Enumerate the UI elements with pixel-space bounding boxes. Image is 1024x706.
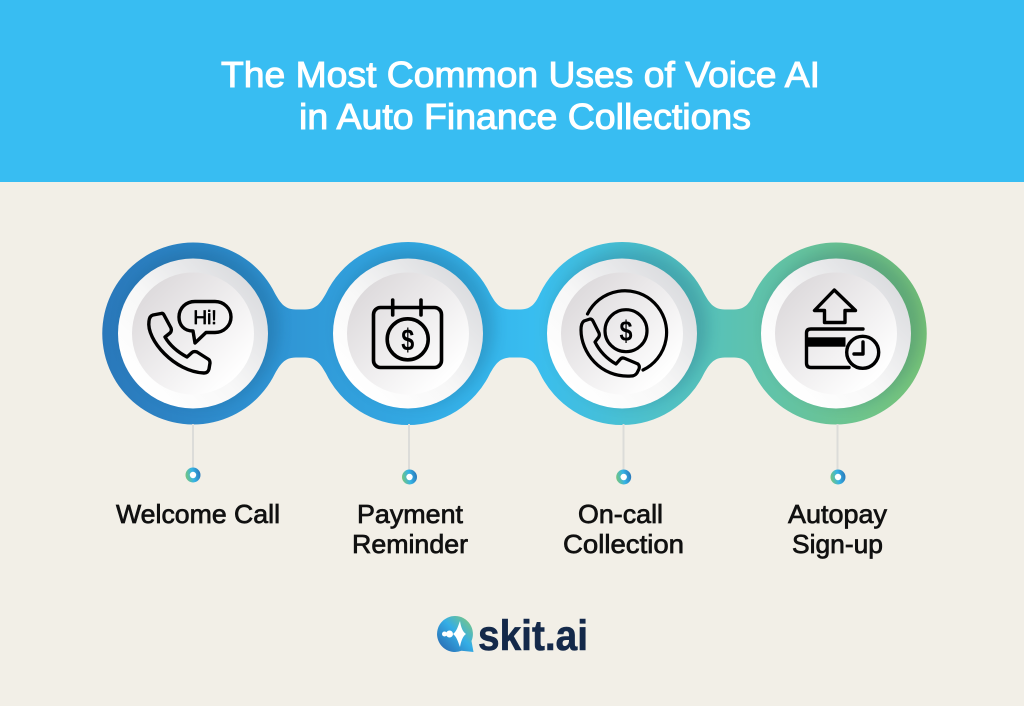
- dot: autopay sign-up: [830, 470, 846, 484]
- disc: payment reminder: [333, 258, 483, 408]
- label: on-call collection: On-call: [578, 499, 663, 529]
- label: payment reminder: Payment: [357, 499, 464, 529]
- icon: credit card with upload arrow and clock: [806, 290, 879, 368]
- icon: phone with Hi speech bubble: [149, 302, 231, 373]
- label: autopay sign-up: Sign-up: [792, 529, 883, 559]
- title: [221, 54, 820, 137]
- stem: payment reminder: [408, 424, 410, 472]
- label: on-call collection: [563, 499, 684, 559]
- icon: phone with circular arrow and dollar coin: [581, 291, 667, 376]
- icon: phone with circular arrow and dollar coin: $: [620, 316, 632, 348]
- logo wordmark: skit.ai: [478, 612, 588, 660]
- logo: skit.ai: [437, 612, 588, 660]
- header banner: [0, 0, 1024, 182]
- title: in Auto Finance Collections: [299, 96, 751, 137]
- icon: calendar with dollar coin: [374, 300, 442, 368]
- dot: payment reminder: [402, 470, 417, 484]
- icon: phone with Hi speech bubble: Hi!: [193, 308, 217, 329]
- stem: autopay sign-up: [836, 424, 838, 472]
- stem: welcome call: [192, 424, 194, 470]
- label: welcome call: Welcome Call: [116, 499, 280, 529]
- disc: autopay sign-up: [761, 258, 911, 408]
- label: payment reminder: [352, 499, 468, 559]
- disc: on-call collection: [547, 258, 697, 408]
- icon: calendar with dollar coin: $: [401, 322, 414, 357]
- dot: on-call collection: [616, 470, 631, 484]
- disc: welcome call: [118, 258, 268, 408]
- label: payment reminder: Reminder: [352, 529, 468, 559]
- connected gradient band: [95, 235, 935, 430]
- label: autopay sign-up: [788, 499, 887, 559]
- label: on-call collection: Collection: [563, 529, 684, 559]
- title: The Most Common Uses of Voice AI: [221, 54, 820, 95]
- dot: welcome call: [186, 468, 200, 482]
- label: autopay sign-up: Autopay: [788, 499, 887, 529]
- logo icon: speech bubble with waveform: [437, 616, 474, 652]
- stem: on-call collection: [622, 424, 624, 472]
